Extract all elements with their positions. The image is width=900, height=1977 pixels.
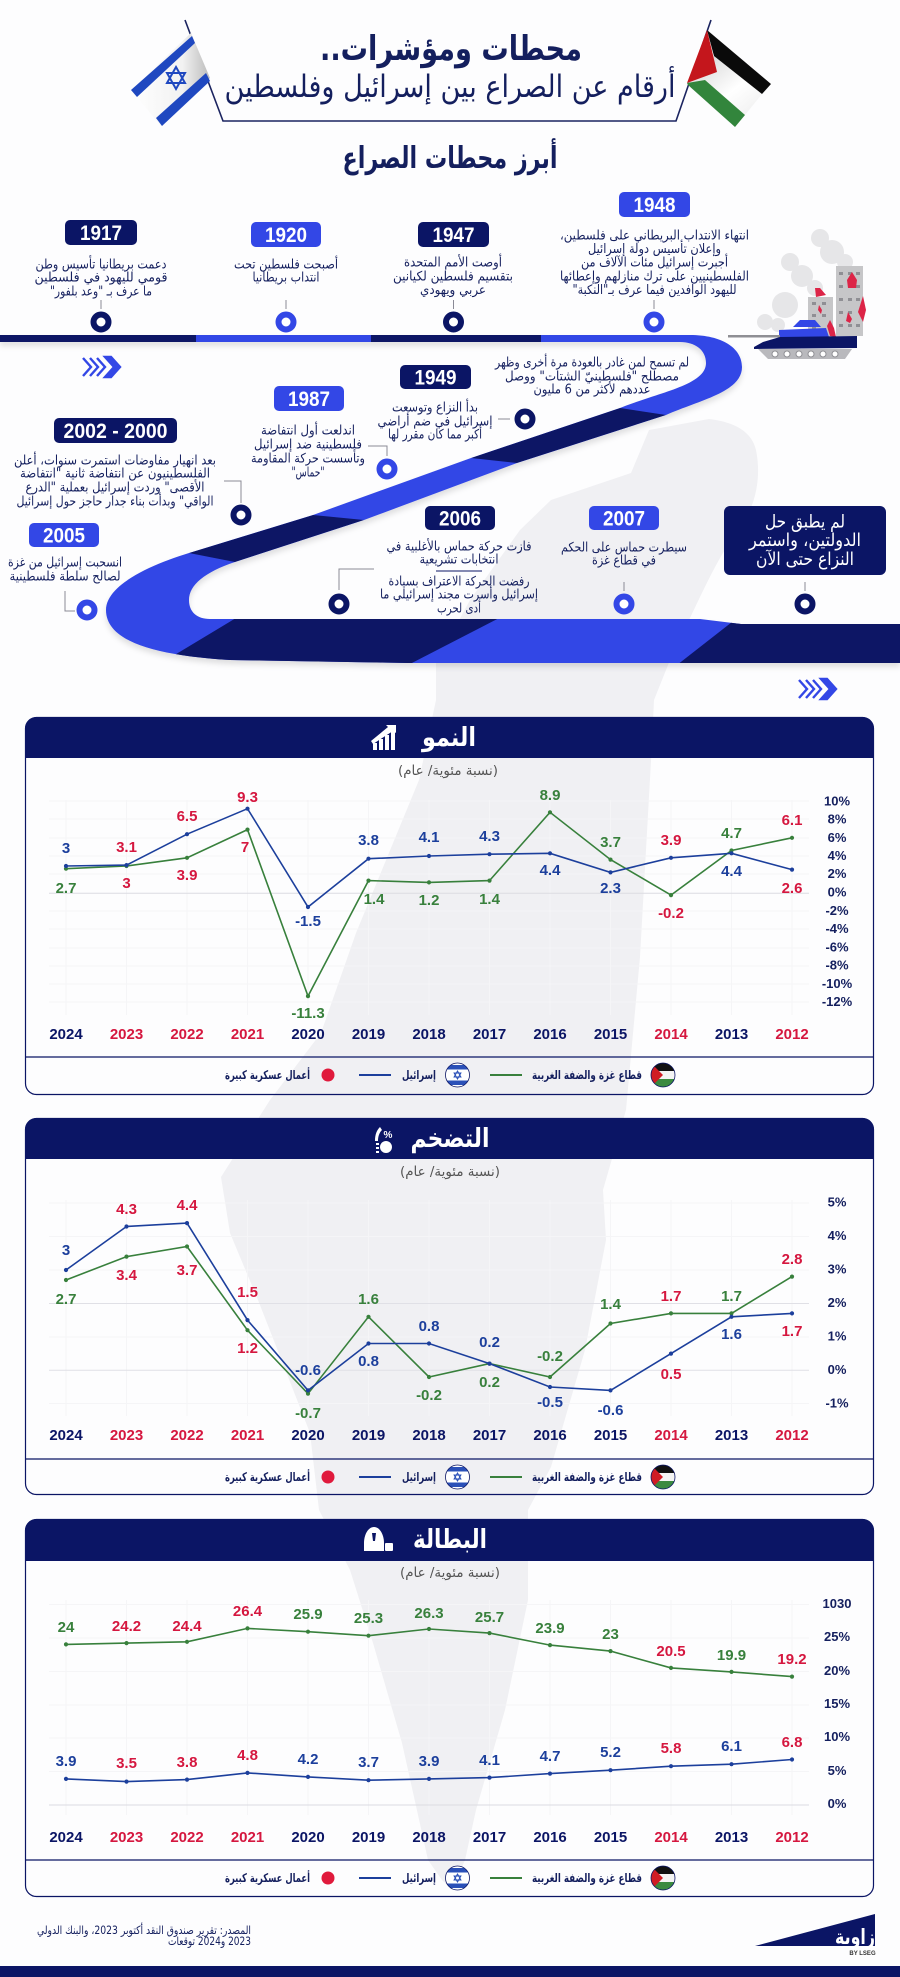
milestone 2007 [561, 506, 687, 612]
blue line: Israel inflation [66, 1223, 792, 1390]
data labels: unemployment: 4.1 [479, 1752, 500, 1769]
data labels: unemployment: 3.7 [358, 1754, 379, 1771]
data labels: unemployment: 3.9 [419, 1753, 439, 1770]
data labels: growth: 7 [241, 839, 249, 856]
blue line: Israel growth [66, 809, 792, 907]
y axis: growth: 0% [828, 884, 847, 900]
data labels: inflation: 4.4 [177, 1197, 198, 1214]
source note: المصدر: تقرير صندوق النقد أكتوبر 2023، والبنك الدولي [37, 1922, 251, 1938]
data labels: unemployment: 20.5 [656, 1643, 686, 1660]
milestone 2000-2002: الأقصى" وردت إسرائيل بعملية "الدرع [26, 478, 204, 496]
y axis: inflation: 1% [828, 1328, 847, 1344]
x axis: inflation: 2017 [473, 1427, 506, 1444]
x axis: unemployment: 2024 [49, 1829, 83, 1846]
title: أرقام عن الصراع بين إسرائيل وفلسطين [224, 66, 676, 105]
x axis: inflation: 2023 [110, 1427, 143, 1444]
milestone 1920: أصبحت فلسطين تحت [234, 256, 338, 272]
growth grid [49, 800, 809, 1015]
milestone 1947: بتقسيم فلسطين لكيانين [393, 270, 513, 284]
milestone 1917 [34, 220, 168, 330]
flag: Israel [131, 33, 210, 126]
data labels: inflation: 0.5 [661, 1366, 681, 1383]
x axis: growth: 2019 [352, 1026, 385, 1043]
data labels: growth: 3.9 [177, 867, 197, 884]
heading: inflation: التضخم [410, 1124, 490, 1154]
y axis: unemployment: 0% [828, 1796, 847, 1811]
x axis: growth: 2021 [231, 1026, 264, 1043]
main heading frame [185, 20, 711, 121]
inflation grid [49, 1200, 809, 1416]
milestone 1949: بدأ النزاع وتوسعت [392, 398, 478, 416]
data labels: growth: 4.4 [540, 862, 561, 879]
y axis: unemployment [823, 1596, 851, 1811]
y axis: inflation: 5% [828, 1194, 847, 1210]
x axis: growth: 2015 [594, 1026, 627, 1043]
callout: no two-state solution [724, 506, 886, 612]
x axis: unemployment: 2015 [594, 1829, 627, 1846]
data labels: unemployment: 19.9 [717, 1647, 746, 1664]
data labels: growth: 2.6 [782, 880, 802, 897]
milestone 2006 [332, 506, 538, 616]
data labels: inflation: -0.6 [295, 1362, 321, 1379]
milestone 1987: اندلعت أول انتفاضة [261, 422, 355, 438]
y axis: inflation: 0% [828, 1362, 847, 1377]
data labels: growth: 3.7 [600, 834, 621, 851]
data labels: unemployment [56, 1603, 807, 1772]
milestone 2000-2002: بعد انهيار مفاوضات استمرت سنوات، أعلن [14, 452, 216, 468]
x axis: inflation: 2014 [654, 1427, 688, 1444]
data labels: unemployment: 24.4 [172, 1618, 202, 1635]
milestone 2007: في قطاع غزة [592, 554, 656, 568]
y axis: growth: -10% [822, 976, 853, 991]
milestone 1947 [393, 222, 513, 330]
legend: inflation: إسرائيل [402, 1470, 436, 1484]
data labels: inflation: -0.2 [537, 1348, 563, 1365]
data labels: unemployment: 25.9 [293, 1606, 323, 1623]
callout: no two-state solution: الدولتين، واستمر [748, 530, 861, 551]
source note: 2023 و2024 توقعات [168, 1934, 251, 1949]
data labels: unemployment: 3.5 [116, 1755, 137, 1772]
milestone 1949 [378, 365, 532, 442]
data labels: growth [56, 787, 802, 1022]
x axis: unemployment: 2020 [291, 1829, 325, 1846]
x axis: unemployment: 2014 [654, 1829, 688, 1846]
x axis: growth: 2023 [110, 1026, 143, 1043]
data labels: unemployment: 23.9 [535, 1620, 565, 1637]
x axis: inflation [49, 1427, 809, 1444]
x axis: growth: 2017 [473, 1026, 506, 1043]
data labels: inflation: 1.7 [721, 1288, 742, 1305]
milestone 1948: انتهاء الانتداب البريطاني على فلسطين، [560, 228, 749, 244]
panel: inflation [25, 1118, 874, 1494]
milestone 2000-2002: 2002 - 2000 [64, 420, 168, 443]
data labels: unemployment: 4.7 [540, 1748, 560, 1765]
icon: coins and percent: % [384, 1130, 393, 1141]
milestone 1947: عربي ويهودي [420, 283, 486, 298]
data labels: growth: -0.2 [658, 905, 684, 922]
milestone 1949: 1949 [414, 366, 456, 390]
callout: no two-state solution: النزاع حتى الآن [756, 548, 854, 570]
y axis: growth: -2% [825, 903, 849, 918]
milestone 1948: وإعلان تأسيس دولة إسرائيل [588, 239, 721, 257]
icon: coins and percent [375, 1127, 393, 1153]
data labels: unemployment: 4.8 [237, 1747, 258, 1764]
milestone 2000-2002 [14, 418, 248, 522]
x axis: inflation: 2015 [594, 1427, 627, 1444]
milestone 2005: 2005 [43, 524, 85, 548]
x axis: unemployment: 2023 [110, 1829, 143, 1846]
x axis: growth: 2020 [291, 1026, 325, 1043]
heading: unemployment: البطالة [413, 1525, 487, 1555]
milestone 2006: انتخابات تشريعية [420, 552, 498, 568]
data labels: growth: -1.5 [295, 913, 321, 930]
x axis: inflation: 2019 [352, 1427, 385, 1444]
data labels: growth: 4.1 [419, 829, 439, 846]
y axis: growth: -6% [825, 940, 849, 954]
x axis: growth: 2022 [170, 1026, 204, 1043]
milestone 2007: 2007 [603, 508, 645, 530]
data labels: unemployment: 23 [602, 1626, 619, 1643]
milestone 2007: سيطرت حماس على الحكم [561, 540, 687, 556]
legend: inflation [225, 1465, 675, 1489]
data labels: inflation: 0.8 [419, 1318, 439, 1335]
data labels: growth: 2.7 [56, 880, 76, 897]
milestone 2000-2002: الفلسطينيون عن انتفاضة ثانية "انتفاضة [20, 466, 210, 482]
y axis: growth: 2% [828, 866, 847, 881]
data labels: inflation: 1.6 [721, 1326, 742, 1343]
milestone 2000-2002: الواقي" وبدأت بناء جدار حاجز حول إسرائيل [16, 492, 214, 510]
data labels: inflation: 3.7 [177, 1262, 197, 1279]
note: diaspora text: لم تسمح لمن غادر بالعودة مرة أخرى وظهر [494, 354, 689, 370]
icon: rising bars [371, 725, 396, 750]
y axis: unemployment: 1030 [823, 1596, 851, 1611]
data labels: inflation: -0.6 [598, 1402, 623, 1419]
subtitle: growth: (نسبة مئوية/ عام) [398, 763, 498, 779]
data labels: unemployment: 6.1 [721, 1738, 742, 1755]
data labels: unemployment: 3.9 [56, 1753, 76, 1770]
x axis: growth: 2018 [412, 1026, 446, 1043]
milestone 1947: أوصت الأمم المتحدة [404, 254, 502, 270]
data labels: unemployment: 3.8 [177, 1754, 197, 1771]
callout: no two-state solution: لم يطبق حل [765, 512, 845, 532]
x axis: unemployment: 2022 [170, 1829, 204, 1846]
data labels: inflation: 3 [62, 1242, 70, 1259]
data labels: inflation: -0.5 [537, 1394, 563, 1411]
data labels: inflation: 1.6 [358, 1291, 379, 1308]
legend: unemployment: إسرائيل [402, 1871, 436, 1885]
legend: unemployment [225, 1866, 675, 1890]
data labels: growth: 6.1 [782, 812, 802, 829]
y axis: unemployment: 10% [824, 1729, 850, 1744]
milestone 1948: الفلسطينيين على ترك منازلهم وإعطائها [560, 270, 749, 284]
x axis: inflation: 2024 [49, 1427, 83, 1444]
x axis: inflation: 2021 [231, 1427, 264, 1444]
x axis: unemployment [49, 1829, 809, 1846]
milestone 1948: لليهود الوافدين فيما عرف بـ"النكبة" [572, 283, 736, 298]
y axis: growth: -12% [822, 994, 853, 1009]
y axis: unemployment: 25% [824, 1629, 850, 1644]
data labels: growth: 6.5 [177, 808, 197, 825]
data labels: growth: 4.7 [721, 825, 742, 842]
data labels: growth: 3 [62, 840, 70, 857]
milestone 1917: ما عرف بـ "وعد بلفور" [50, 284, 152, 300]
milestone 2006: إسرائيل وأسرت مجند إسرائيلي ما [380, 586, 538, 602]
data labels: unemployment: 5.8 [661, 1740, 681, 1757]
y axis: growth: 8% [828, 812, 847, 826]
x axis: inflation: 2020 [291, 1427, 325, 1444]
y axis: growth: 6% [828, 830, 847, 845]
flag: Palestine [687, 30, 771, 127]
data labels: unemployment: 24 [58, 1619, 75, 1636]
legend: unemployment: أعمال عسكرية كبيرة [225, 1870, 310, 1885]
x axis: inflation: 2022 [170, 1427, 204, 1444]
data labels: growth: 3.1 [116, 839, 137, 856]
note: diaspora text [494, 354, 689, 398]
data labels: inflation: -0.2 [416, 1387, 442, 1404]
title: محطات ومؤشرات.. [320, 29, 582, 69]
milestone 2006: رفضت الحركة الاعتراف بسيادة [388, 574, 530, 590]
x axis: unemployment: 2012 [775, 1829, 809, 1846]
data labels: inflation: 1.7 [782, 1323, 802, 1340]
data labels: unemployment: 4.2 [298, 1751, 318, 1768]
milestone 2006: فازت حركة حماس بالأغلبية في [386, 538, 532, 554]
y axis: unemployment: 20% [824, 1663, 850, 1678]
milestone 2006: 2006 [439, 508, 481, 530]
logo: زاوية [835, 1925, 875, 1949]
x axis: growth [49, 1026, 809, 1043]
y axis: growth: -4% [825, 921, 849, 936]
milestone 1948: أجبرت إسرائيل مئات الآلاف من [581, 254, 728, 270]
legend: inflation: أعمال عسكرية كبيرة [225, 1469, 310, 1484]
milestone 1949: إسرائيل في ضم أراضي [378, 412, 492, 430]
green line: Gaza and West Bank inflation [66, 1246, 792, 1394]
data labels: unemployment: 19.2 [777, 1651, 807, 1668]
milestone 1917: قومي لليهود في فلسطين [34, 270, 168, 286]
milestone 1920 [234, 222, 338, 330]
milestone 1987: وتأسست حركة المقاومة [251, 448, 365, 466]
data labels: inflation: -0.7 [295, 1405, 321, 1422]
milestone 1947: 1947 [432, 224, 474, 247]
milestone 1917: دعمت بريطانيا تأسيس وطن [36, 254, 167, 272]
data labels: inflation: 0.2 [479, 1374, 500, 1391]
data labels: growth: 3.9 [661, 832, 681, 849]
data labels: unemployment: 25.7 [475, 1609, 504, 1626]
x axis: unemployment: 2013 [715, 1829, 748, 1846]
y axis: inflation [825, 1194, 849, 1410]
data labels: growth: -11.3 [291, 1005, 325, 1022]
y axis: inflation: 2% [828, 1295, 847, 1310]
data labels: unemployment: 26.4 [233, 1603, 263, 1620]
legend: growth [225, 1063, 675, 1087]
note: diaspora text: عددهم لأكثر من 6 مليون [534, 380, 650, 398]
data labels: growth: 8.9 [540, 787, 560, 804]
y axis: growth: 10% [824, 794, 850, 808]
milestone 1987 [251, 386, 394, 480]
footer bar [0, 1966, 900, 1977]
x axis: growth: 2012 [775, 1026, 809, 1043]
data labels: inflation: 0.2 [479, 1334, 500, 1351]
chevron arrows right [799, 679, 836, 699]
x axis: growth: 2014 [654, 1026, 688, 1043]
milestone 1948 [560, 192, 749, 330]
milestone 1948: 1948 [634, 194, 676, 217]
data labels: growth: 1.4 [364, 891, 385, 908]
y axis: unemployment: 15% [824, 1696, 850, 1711]
milestone 1920: انتداب بريطانيا [252, 270, 320, 286]
milestone 1987: "حماس" [292, 466, 324, 480]
data labels: inflation: 1.7 [661, 1288, 681, 1305]
y axis: inflation: 3% [828, 1262, 847, 1276]
data labels: unemployment: 25.3 [354, 1610, 383, 1627]
legend: growth: أعمال عسكرية كبيرة [225, 1067, 310, 1082]
x axis: growth: 2013 [715, 1026, 748, 1043]
legend: inflation: قطاع غزة والضفة الغربية [532, 1470, 642, 1485]
x axis: inflation: 2012 [775, 1427, 809, 1444]
milestone 2005: انسحبت إسرائيل من غزة [8, 556, 122, 570]
heading: growth: النمو [420, 723, 476, 753]
x axis: unemployment: 2017 [473, 1829, 506, 1846]
y axis: growth [822, 794, 853, 1009]
milestone 1917: 1917 [80, 222, 122, 245]
data labels: unemployment: 26.3 [414, 1605, 444, 1622]
data labels: inflation [56, 1197, 802, 1422]
y axis: growth: 4% [828, 848, 847, 863]
x axis: unemployment: 2018 [412, 1829, 446, 1846]
title [224, 29, 676, 105]
data labels: inflation: 1.4 [600, 1296, 622, 1313]
logo: BY LSEG [849, 1951, 876, 1957]
legend: growth: إسرائيل [402, 1068, 436, 1082]
milestone 2005: لصالح سلطة فلسطينية [10, 570, 120, 584]
background map silhouette [221, 419, 758, 1890]
data labels: inflation: 2.8 [782, 1251, 802, 1268]
data labels: inflation: 3.4 [116, 1267, 138, 1284]
chevron arrows left [83, 357, 120, 377]
data labels: unemployment: 6.8 [782, 1734, 802, 1751]
panel: growth [25, 717, 874, 1094]
data labels: inflation: 4.3 [116, 1201, 137, 1218]
milestone 1949: أكبر مما كان مقرر لها [388, 426, 482, 442]
data labels: growth: 1.4 [479, 891, 501, 908]
x axis: inflation: 2016 [533, 1427, 567, 1444]
data labels: growth: 4.3 [479, 828, 500, 845]
green line: Gaza and West Bank unemployment [66, 1628, 792, 1677]
legend: unemployment: قطاع غزة والضفة الغربية [532, 1871, 642, 1886]
section heading: أبرز محطات الصراع [342, 138, 558, 176]
data labels: inflation: 1.5 [237, 1284, 258, 1301]
blue line: Israel unemployment [66, 1760, 792, 1782]
data labels: inflation: 2.7 [56, 1291, 76, 1308]
y axis: growth: -8% [825, 958, 849, 972]
data labels: growth: 3 [122, 875, 131, 892]
note: diaspora text: مصطلح "فلسطينيّ الشتات" ووصل [505, 370, 679, 384]
data labels: growth: 9.3 [237, 789, 258, 806]
y axis: inflation: -1% [825, 1396, 849, 1410]
data labels: inflation: 1.2 [237, 1340, 258, 1357]
data labels: growth: 3.8 [358, 832, 379, 849]
data labels: inflation: 0.8 [358, 1353, 379, 1370]
subtitle: inflation: (نسبة مئوية/ عام) [400, 1164, 500, 1180]
x axis: unemployment: 2021 [231, 1829, 264, 1846]
milestone 2006: أدى لحرب [437, 600, 481, 616]
x axis: unemployment: 2019 [352, 1829, 385, 1846]
data labels: growth: 4.4 [721, 863, 743, 880]
data labels: unemployment: 5.2 [600, 1744, 621, 1761]
y axis: unemployment: 5% [828, 1763, 847, 1778]
illustration: tank and burning buildings [728, 229, 866, 359]
timeline ribbon [0, 330, 900, 670]
milestone 1920: 1920 [265, 224, 307, 247]
data labels: unemployment: 24.2 [112, 1618, 141, 1635]
milestone 2005 [8, 523, 122, 618]
panel: unemployment [25, 1519, 874, 1896]
source note [37, 1922, 251, 1949]
y axis: inflation: 4% [828, 1228, 847, 1243]
data labels: growth: 1.2 [419, 892, 439, 909]
x axis: inflation: 2018 [412, 1427, 446, 1444]
x axis: unemployment: 2016 [533, 1829, 567, 1846]
green line: Gaza and West Bank growth [66, 812, 792, 996]
x axis: inflation: 2013 [715, 1427, 748, 1444]
x axis: growth: 2024 [49, 1026, 83, 1043]
x axis: growth: 2016 [533, 1026, 567, 1043]
logo [755, 1914, 876, 1957]
milestone 1987: فلسطينية ضد إسرائيل [254, 438, 362, 452]
data labels: growth: 2.3 [600, 880, 621, 897]
subtitle: unemployment: (نسبة مئوية/ عام) [400, 1565, 500, 1581]
icon: person with suitcase [364, 1527, 393, 1551]
unemployment grid [49, 1600, 809, 1815]
milestone 1987: 1987 [288, 388, 330, 411]
legend: growth: قطاع غزة والضفة الغربية [532, 1068, 642, 1083]
